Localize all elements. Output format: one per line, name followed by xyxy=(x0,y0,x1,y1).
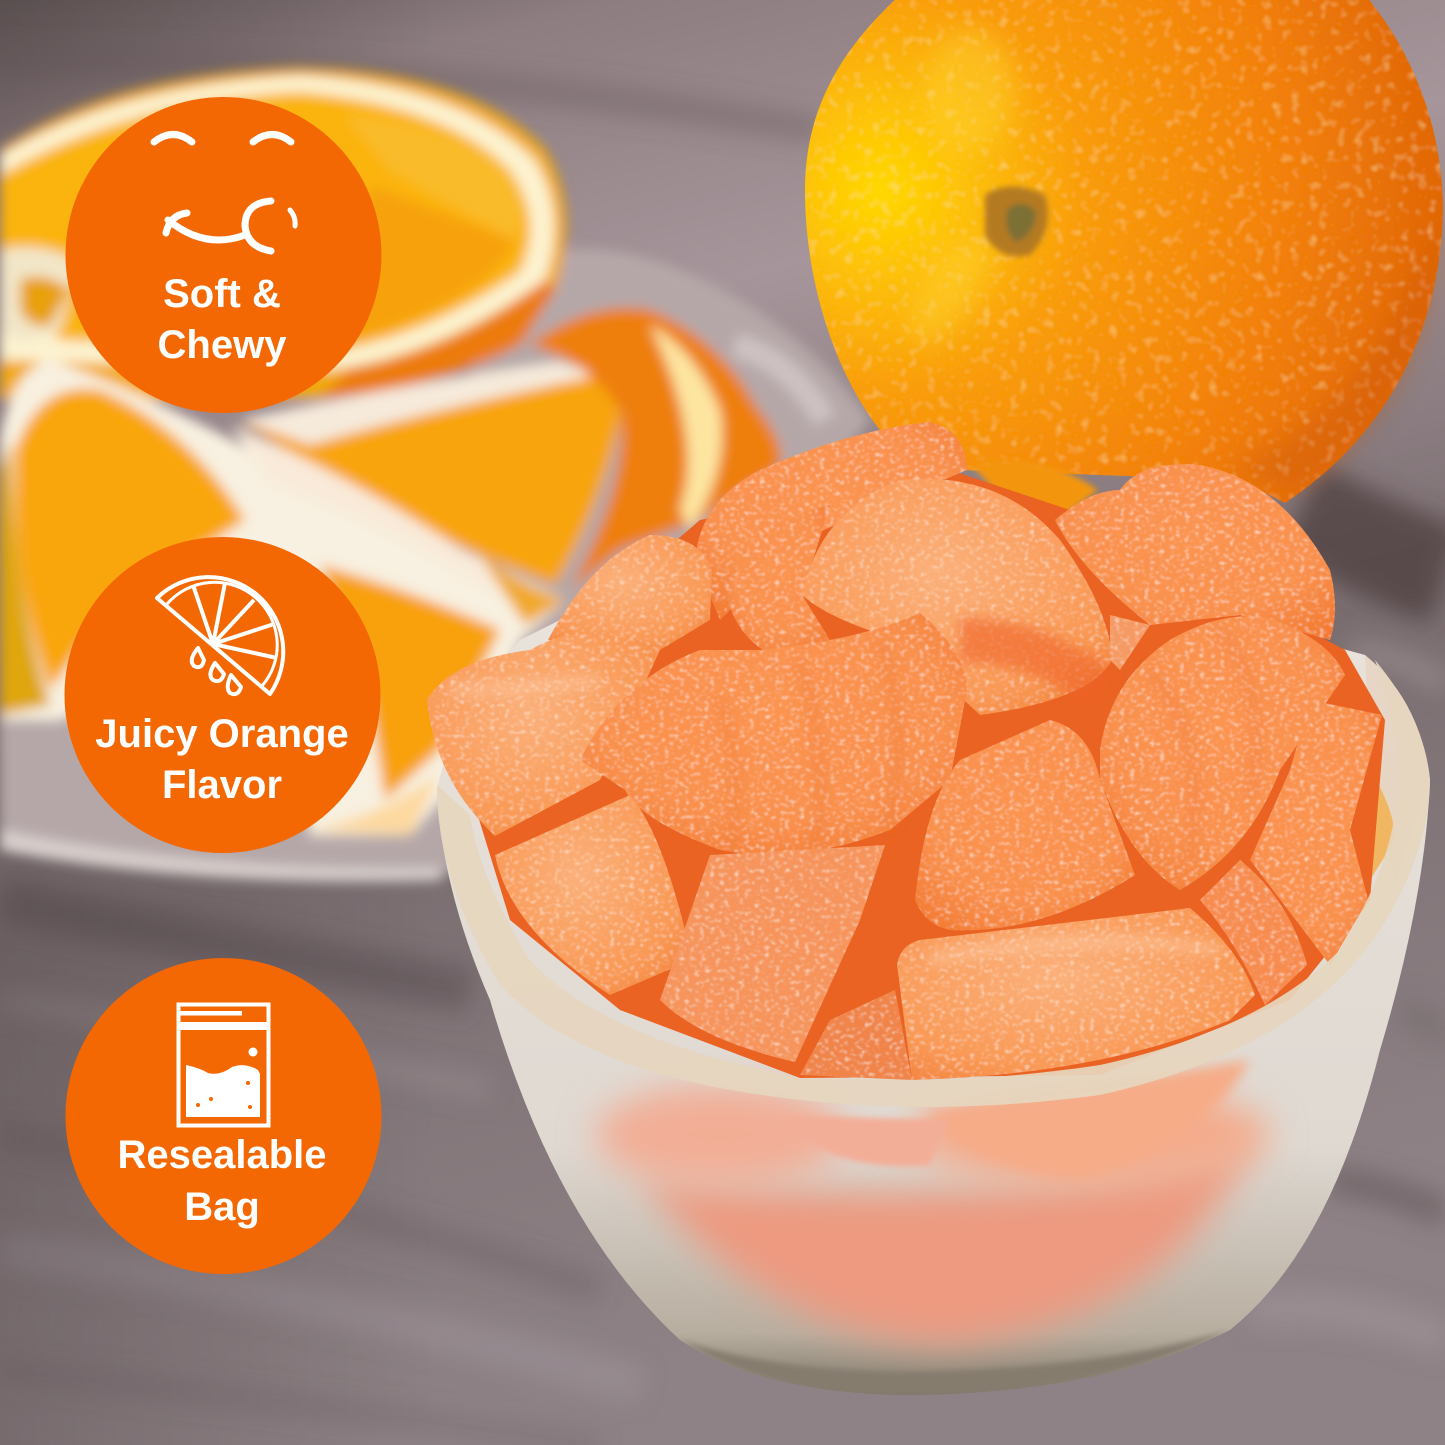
label: juicy orange flavor: Flavor xyxy=(162,763,282,807)
orange shading xyxy=(1230,210,1443,490)
badge: juicy orange flavor xyxy=(64,537,380,853)
candy ridges and shadows xyxy=(450,630,1256,960)
candy shadow base xyxy=(470,470,1385,1078)
candy pile xyxy=(427,422,1382,1080)
label: resealable bag: Bag xyxy=(184,1185,260,1229)
icon: orange slice with drops xyxy=(157,577,283,694)
whole orange, back right xyxy=(805,0,1443,503)
bowl rim xyxy=(437,660,1430,1107)
orange highlights xyxy=(894,30,1015,354)
orange wedge, right xyxy=(530,308,781,590)
badge: resealable bag xyxy=(66,958,382,1274)
candy seen through the glass xyxy=(595,1060,1270,1395)
label: resealable bag: Resealable xyxy=(117,1133,327,1177)
halved orange, back left xyxy=(0,68,565,400)
label: soft and chewy: Chewy xyxy=(158,323,287,367)
blurred plate with orange slices xyxy=(0,68,870,881)
label: soft and chewy: Soft & xyxy=(163,272,281,316)
label: juicy orange flavor: Juicy Orange xyxy=(95,712,349,756)
orange wedge, front left xyxy=(0,360,565,835)
orange stem xyxy=(985,186,1048,256)
glass bowl with candies xyxy=(427,422,1430,1395)
plate xyxy=(0,249,870,881)
orange wedge, centre xyxy=(240,362,620,585)
bowl body xyxy=(437,500,1430,1395)
orange piece behind candy xyxy=(972,461,1098,520)
badge: soft and chewy xyxy=(66,97,382,413)
bowl far wall xyxy=(1365,655,1430,880)
icon: resealable bag xyxy=(178,1004,268,1126)
icon: smiling face xyxy=(154,134,295,251)
